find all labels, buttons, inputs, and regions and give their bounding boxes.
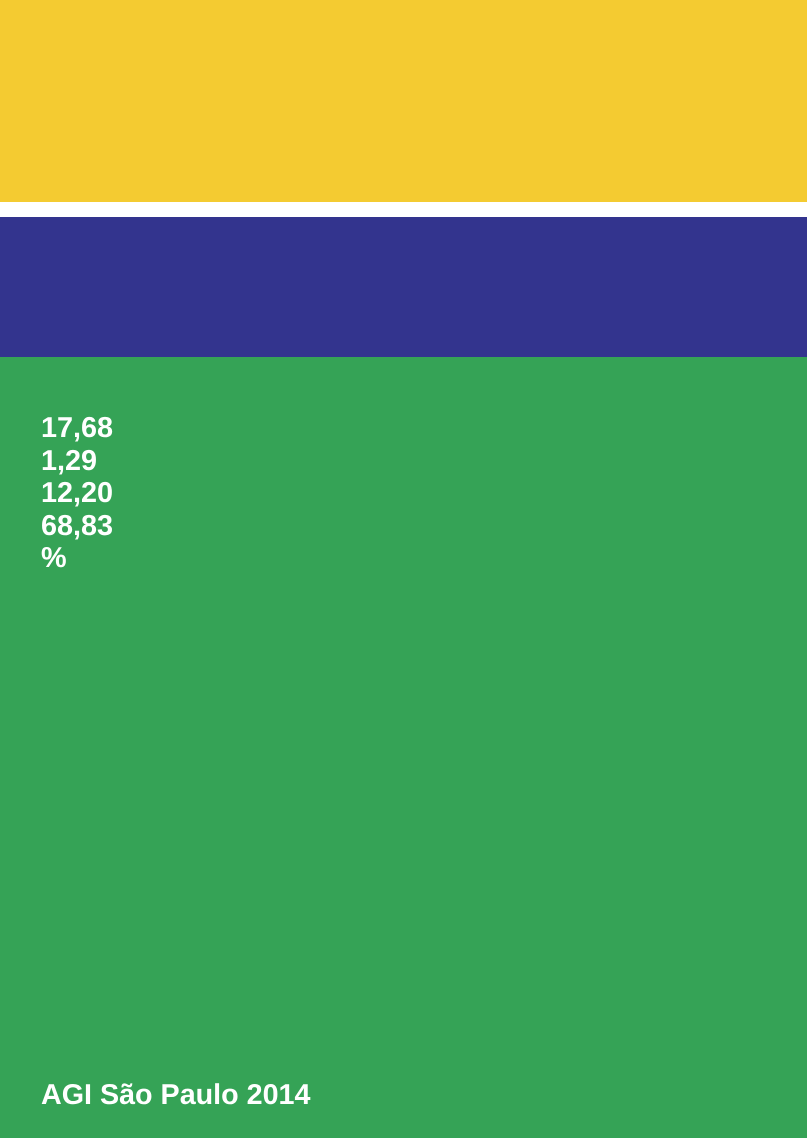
footer title: AGI São Paulo 2014	[41, 1079, 310, 1111]
panel: blue band	[0, 217, 807, 357]
text block: percentages: 17,68	[41, 412, 113, 444]
panel: green band	[0, 357, 807, 1138]
text block: percentages: %	[41, 542, 67, 574]
text block: percentages: 1,29	[41, 445, 97, 477]
text block: percentages: 68,83	[41, 510, 113, 542]
text block: percentages: 12,20	[41, 477, 113, 509]
panel: yellow band	[0, 0, 807, 202]
text block: percentages	[41, 412, 113, 574]
